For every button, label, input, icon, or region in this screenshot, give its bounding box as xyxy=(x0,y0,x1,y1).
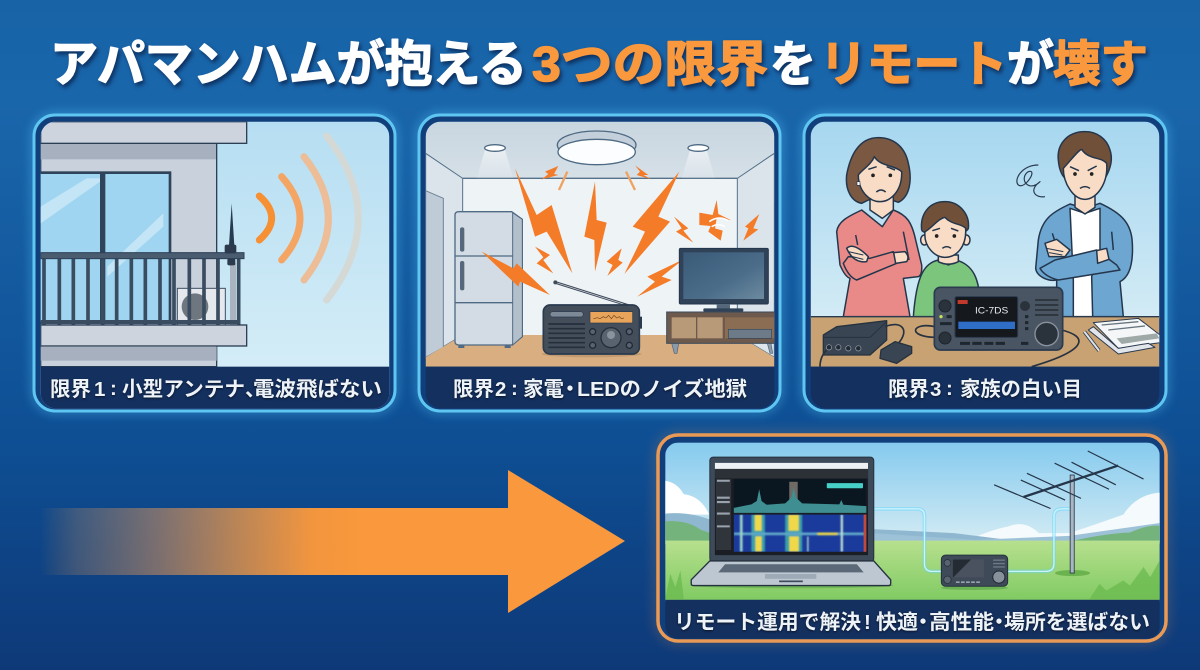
caption: limit 1: 電波飛ばない xyxy=(253,378,382,401)
arrow: from limits to remote solution xyxy=(40,470,625,613)
title: を xyxy=(770,38,816,92)
figure: child xyxy=(913,202,982,317)
caption: limit 2 xyxy=(453,377,748,401)
panel: remote operation solution xyxy=(658,435,1166,641)
caption: limit 3: 限界 xyxy=(888,378,929,401)
title: リモート xyxy=(820,38,1007,92)
caption: remote operation: 快適 xyxy=(876,611,918,634)
illustration: laptop, radio, antenna in a field xyxy=(665,443,1160,640)
figure: man xyxy=(1036,132,1132,317)
panel: limit 3 family xyxy=(804,115,1166,411)
caption: limit 1: 、 xyxy=(245,378,266,401)
icon: remote transceiver xyxy=(941,555,1008,590)
caption: limit 2: 限界 xyxy=(453,378,494,401)
cable: glowing connection xyxy=(874,509,1071,571)
icon: yagi antenna xyxy=(994,451,1144,576)
caption: remote operation xyxy=(674,611,1150,634)
caption: limit 1: 1 xyxy=(94,378,105,401)
caption: remote operation: リモート運用で解決 xyxy=(674,611,862,634)
title: 壊す xyxy=(1053,38,1148,92)
illustration: balcony and radio waves xyxy=(37,122,389,410)
illustration: family and transceiver: IC-7DS xyxy=(975,305,1008,315)
caption: limit 1: 限界 xyxy=(50,378,91,401)
panel: limit 1 small antenna xyxy=(34,115,395,411)
caption: limit 3: : xyxy=(946,377,953,400)
caption: remote operation: ・ xyxy=(913,611,933,634)
title: 3つの限界 xyxy=(532,38,768,92)
caption: remote operation: 高性能 xyxy=(929,611,995,634)
illustration: room with noise xyxy=(426,122,780,410)
caption: limit 2: LEDのノイズ地獄 xyxy=(577,377,748,401)
caption: limit 3 xyxy=(888,377,1082,401)
title xyxy=(50,38,1148,92)
caption: remote operation: 場所を選ばない xyxy=(1004,611,1150,634)
caption: limit 3: 3 xyxy=(930,378,941,401)
figure: woman xyxy=(837,138,922,317)
caption: limit 2: ・ xyxy=(560,378,580,401)
title: が xyxy=(1007,38,1054,92)
caption: limit 2: : xyxy=(511,377,518,400)
caption: limit 1: 小型アンテナ xyxy=(122,378,245,401)
caption: remote operation: ! xyxy=(864,611,871,634)
caption: limit 2: 家電 xyxy=(523,378,564,401)
title: アパマンハムが抱える xyxy=(50,38,527,92)
icon: laptop with SDR software xyxy=(691,457,893,588)
caption: limit 1 xyxy=(50,377,382,401)
caption: remote operation: ・ xyxy=(989,611,1009,634)
caption: limit 3: 家族の白い目 xyxy=(960,378,1082,401)
panel: limit 2 noise xyxy=(419,115,780,411)
icon: frustration scribble xyxy=(1017,165,1045,197)
caption: limit 1: : xyxy=(110,377,117,400)
illustration: family and transceiver xyxy=(811,122,1160,410)
caption: limit 2: 2 xyxy=(495,378,506,401)
